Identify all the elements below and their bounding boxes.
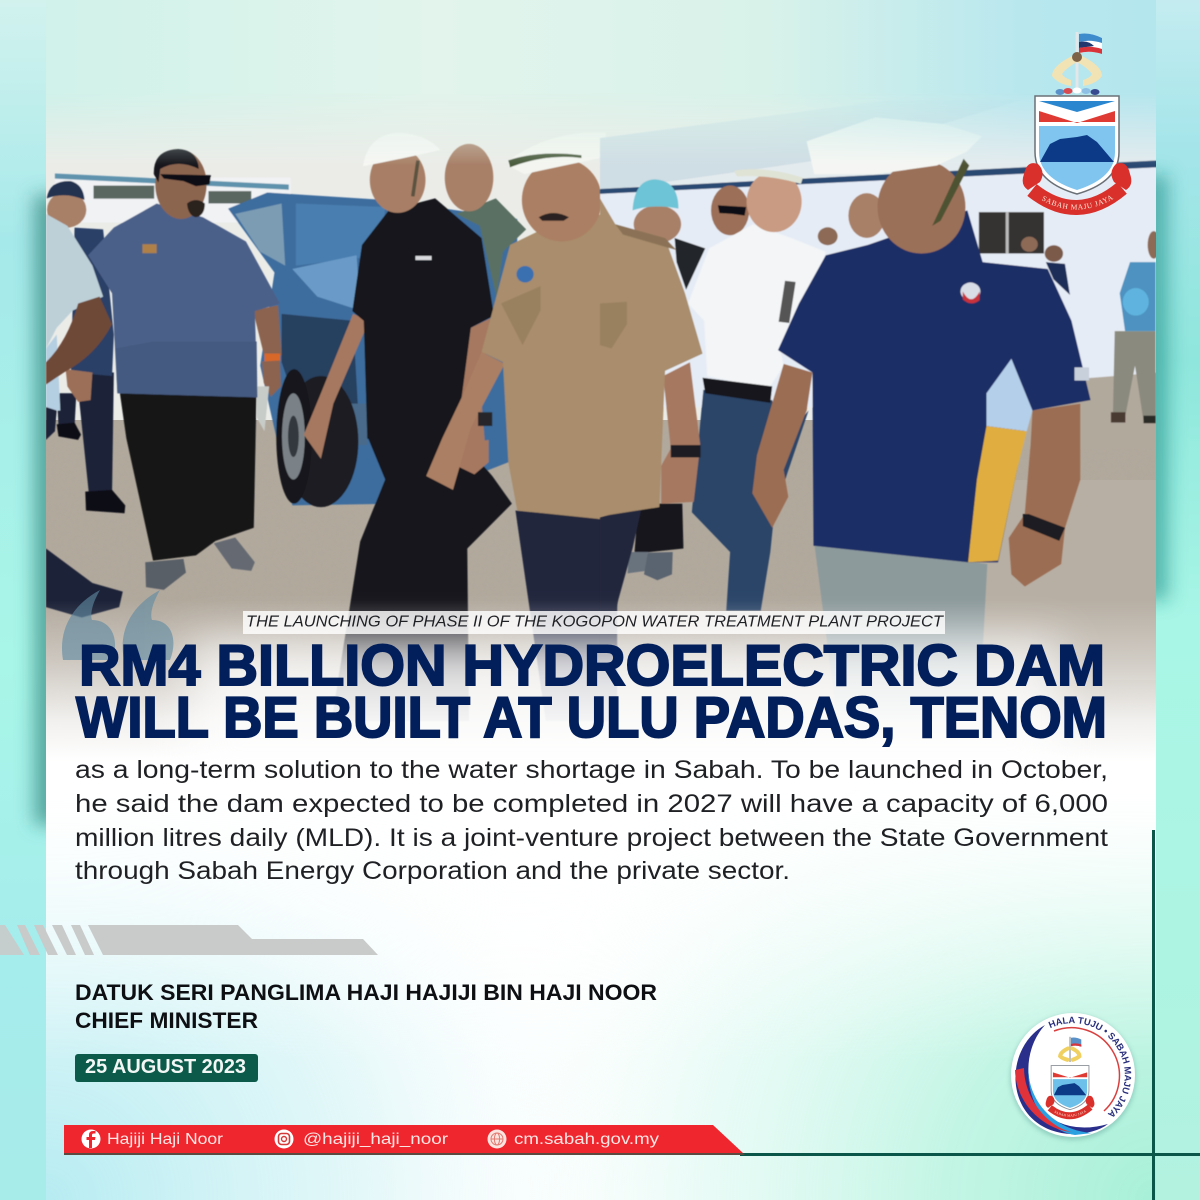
swoosh crescent (1015, 1025, 1108, 1135)
panel shadow (34, 175, 1168, 825)
crest beads (1056, 88, 1100, 95)
left half of photo (46, 132, 617, 721)
caption: event description: THE LAUNCHING OF PHASE II OF THE KOGOPON WATER TREATMENT PLANT PROJECT (246, 614, 944, 630)
body text (75, 756, 1108, 885)
date badge (75, 1054, 258, 1082)
photo backdrop: sky, ground and buildings (46, 90, 1156, 780)
logo: Sabah state coat of arms (1022, 32, 1132, 215)
man in khaki shirt (426, 132, 617, 721)
speaker name and title: DATUK SERI PANGLIMA HAJI HAJIJI BIN HAJI NOOR (75, 980, 657, 1005)
date badge: 25 AUGUST 2023 (85, 1056, 246, 1078)
label: website: cm.sabah.gov.my (514, 1131, 659, 1148)
label: instagram: @hajiji_haji_noor (303, 1131, 449, 1148)
small coat of arms: SABAH MAJU JAYA (1054, 1110, 1086, 1117)
body text: million litres daily (MLD). It is a joint-venture project between the State Government (75, 824, 1108, 852)
man in white shirt (628, 169, 826, 611)
headline: WILL BE BUILT AT ULU PADAS, TENOM (76, 686, 1107, 750)
man in far-left shirt (46, 214, 123, 618)
badge motto: HALA TUJU • SABAH MAJU JAYA (1048, 1016, 1132, 1117)
truck (228, 192, 517, 507)
logo: Hala Tuju Sabah Maju Jaya badge (1008, 1012, 1138, 1142)
photo: officials walking at the plant site (46, 90, 1160, 790)
background people (633, 179, 1160, 423)
person behind left (47, 181, 125, 513)
decorative grey chevron banner (0, 925, 378, 955)
man in blue-grey shirt (88, 149, 282, 590)
arms holding the flag (1052, 52, 1102, 86)
khaki shirt continued (600, 198, 703, 721)
decorative frame lines (740, 830, 1200, 1200)
icon: website globe (488, 1130, 506, 1148)
speaker name and title (75, 980, 657, 1033)
motto ribbon: SABAH MAJU JAYA (1042, 196, 1114, 210)
body text: as a long-term solution to the water shortage in Sabah. To be launched in October, (75, 756, 1108, 784)
left building (55, 173, 291, 222)
icon: instagram (274, 1130, 294, 1148)
social media bar (64, 1125, 745, 1155)
photo fade overlays (46, 600, 1156, 790)
right half of photo (599, 114, 1156, 666)
man in navy polo (752, 117, 1091, 721)
body text: he said the dam expected to be completed in 2027 will have a capacity of 6,000 (75, 790, 1108, 818)
warehouse wall and roof (600, 100, 1159, 448)
inner red arc (1054, 1028, 1119, 1111)
shield (1035, 96, 1119, 194)
headline: RM4 BILLION HYDROELECTRIC DAM (79, 634, 1105, 698)
speaker name and title: CHIEF MINISTER (75, 1008, 258, 1033)
man in black shirt (304, 133, 512, 721)
man with green shirt (445, 144, 526, 297)
panel: white backing (46, 780, 1156, 1200)
flag and pole (1076, 32, 1102, 88)
icon: quotation marks (62, 590, 173, 660)
icon: facebook (82, 1130, 100, 1148)
motto ribbon (1022, 154, 1132, 215)
label: facebook: Hajiji Haji Noor (107, 1131, 224, 1148)
headline (76, 634, 1107, 750)
body text: through Sabah Energy Corporation and the private sector. (75, 857, 790, 885)
